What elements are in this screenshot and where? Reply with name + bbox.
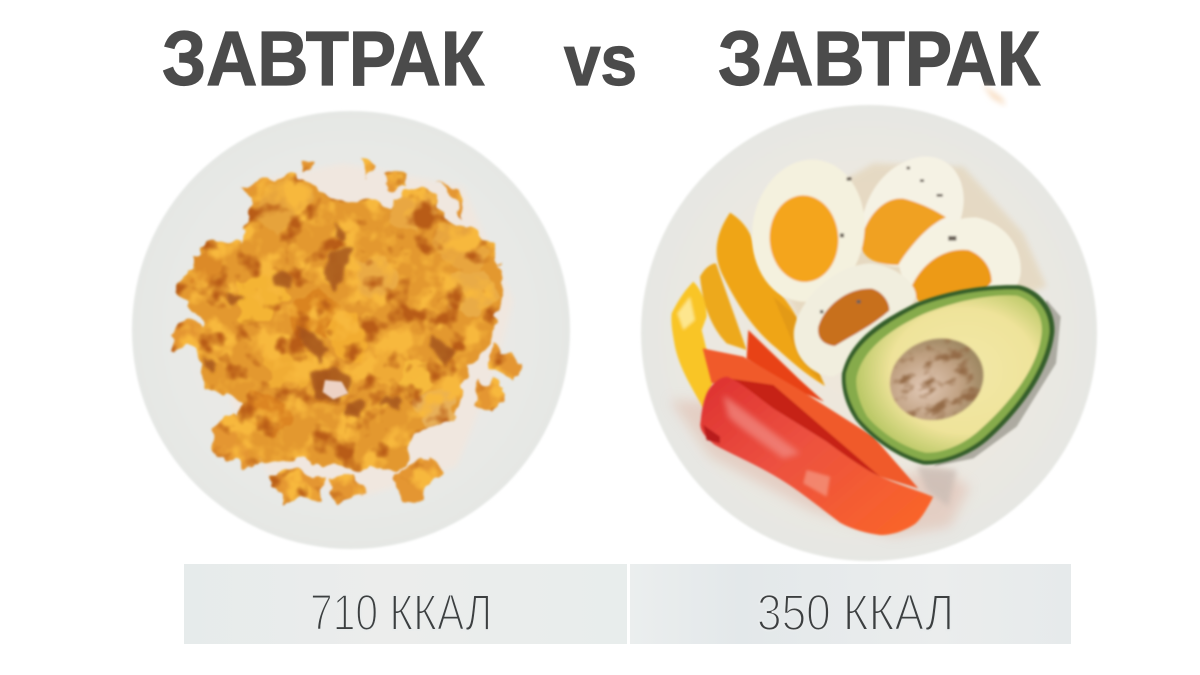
bar background <box>630 564 1071 644</box>
plate disc <box>132 111 570 549</box>
avocado half <box>842 285 1054 465</box>
avocado flesh <box>856 295 1042 453</box>
title: versus: vs <box>564 22 637 101</box>
plate: cereal with milk <box>132 111 570 549</box>
plate: eggs, peppers and avocado <box>641 84 1097 561</box>
milk in cereal <box>323 380 348 399</box>
calorie bar: left <box>184 564 627 644</box>
red pepper strips <box>700 330 933 535</box>
small red strip <box>747 330 824 402</box>
avocado green rim <box>846 290 1049 460</box>
plate disc <box>641 105 1097 561</box>
egg 2 <box>860 157 964 267</box>
egg 3 <box>899 217 1021 303</box>
bar background <box>184 564 627 644</box>
orange speck <box>982 84 1006 106</box>
flake mass <box>168 157 517 507</box>
egg slices <box>743 152 1021 377</box>
egg 4 <box>794 263 916 377</box>
title: left heading: ЗАВТРАК <box>162 16 485 102</box>
front red strip <box>700 377 933 535</box>
calorie bar: right <box>630 564 1071 644</box>
pepper strip light <box>671 282 714 408</box>
pepper strip large <box>717 213 825 386</box>
milk under flakes <box>230 163 513 497</box>
calorie value 710: 710 ККАЛ <box>310 584 492 641</box>
cereal flakes <box>168 157 517 507</box>
pepper specks <box>820 167 956 313</box>
title: right heading: ЗАВТРАК <box>718 16 1041 102</box>
pepper strip mid <box>700 263 747 350</box>
plate shadow <box>670 400 970 537</box>
back red strip <box>703 348 918 488</box>
dark gaps between flakes <box>203 220 453 417</box>
egg 1 <box>743 152 874 309</box>
avocado pit <box>879 327 994 432</box>
avocado skin <box>842 285 1054 465</box>
calorie value 350: 350 ККАЛ <box>757 584 954 641</box>
avocado shadow <box>933 300 1061 467</box>
yellow peppers <box>671 213 825 408</box>
pepper cast shadow <box>917 467 957 507</box>
egg shadow glow <box>753 163 1047 333</box>
